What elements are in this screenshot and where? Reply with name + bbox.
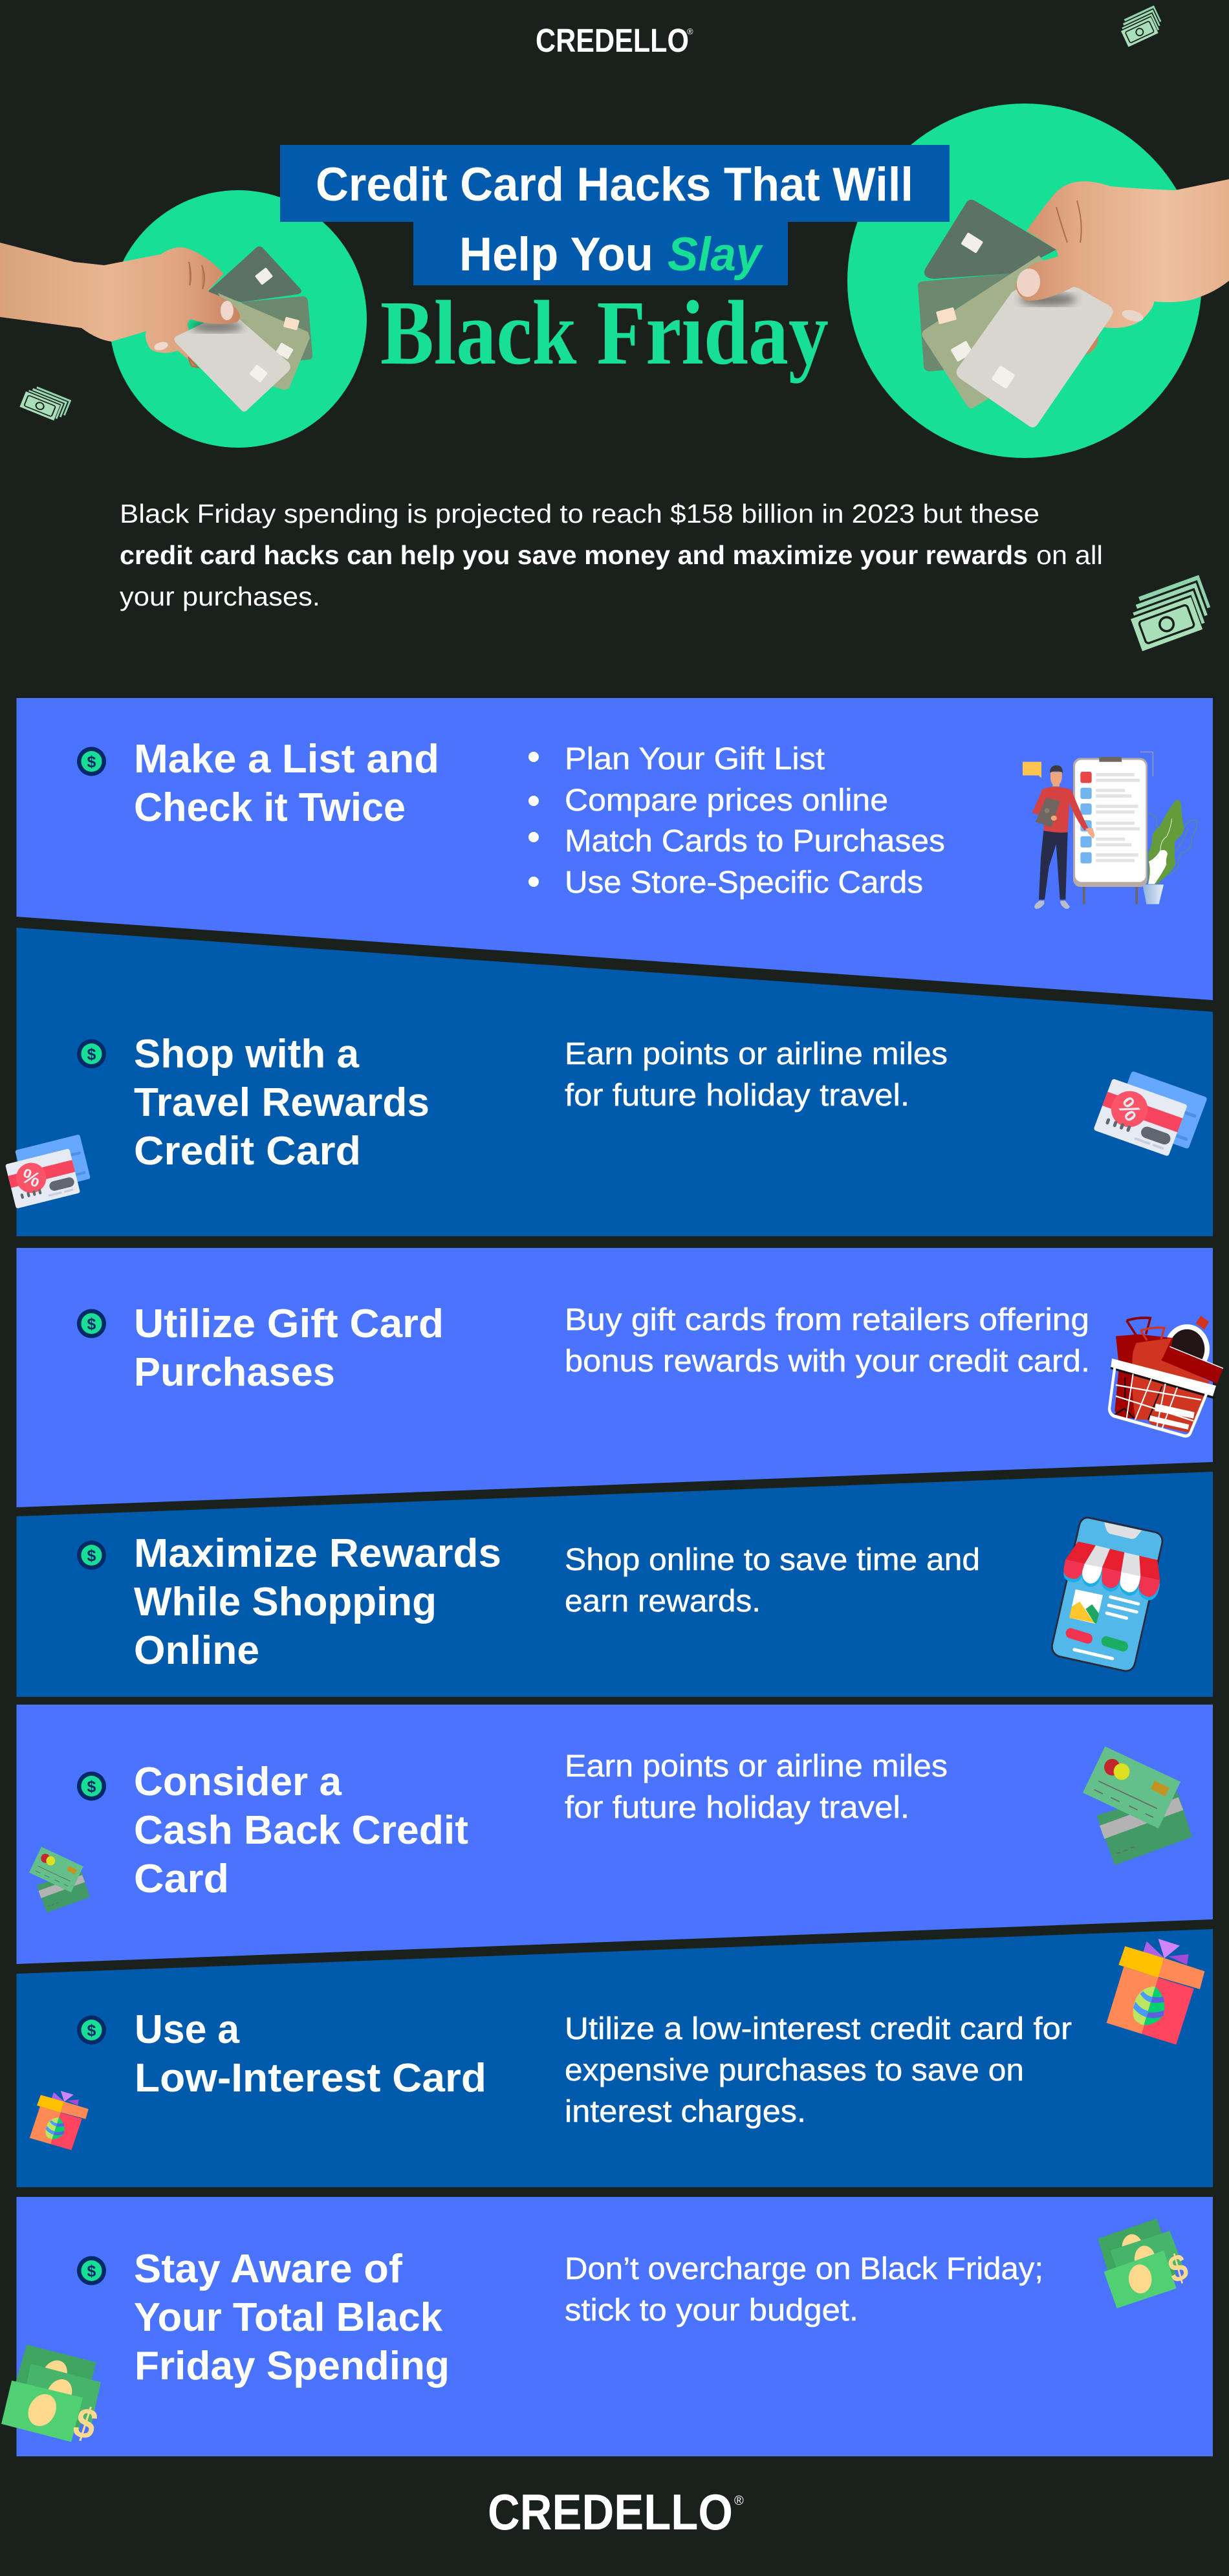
heading: Check it Twice [134, 785, 406, 830]
intro paragraph: your purchases. [120, 582, 320, 611]
body text: stick to your budget. [565, 2293, 858, 2328]
hand palm and fingers [0, 243, 224, 366]
title: Black Friday: Black Friday [380, 281, 829, 384]
body text: Earn points or airline miles [565, 1037, 948, 1071]
icon: coin: $ [87, 1778, 96, 1796]
heading [134, 1032, 430, 1173]
intro paragraph: on all [1036, 540, 1103, 570]
bullet list: Compare prices online [565, 783, 888, 818]
icon: gift right [1107, 1939, 1204, 2045]
icon: coin [77, 1039, 106, 1069]
icon: coin [77, 747, 106, 776]
bullet list [528, 742, 945, 900]
icon: money left [19, 383, 71, 424]
panel: cash back [17, 1705, 1213, 1964]
title box: line 2 [413, 222, 788, 285]
body text: Buy gift cards from retailers offering [565, 1303, 1089, 1337]
icon: coin [77, 1771, 106, 1801]
bullet list: Plan Your Gift List [565, 742, 825, 776]
icon: cash left [0, 2326, 130, 2471]
heading [134, 737, 439, 830]
icon: shopping basket [1109, 1316, 1223, 1436]
intro paragraph [120, 499, 1103, 611]
panel: maximize rewards [17, 1472, 1213, 1697]
heading: Stay Aware of [134, 2247, 402, 2291]
heading [134, 1302, 444, 1395]
cards fan right [918, 200, 1061, 408]
card front right [957, 278, 1113, 428]
heading: Online [134, 1628, 259, 1673]
panel: low interest [17, 1929, 1213, 2187]
illustration: right hand holding cards [847, 104, 1229, 458]
heading: Shop with a [134, 1032, 360, 1076]
heading: While Shopping [134, 1580, 437, 1624]
green circle right [847, 104, 1202, 458]
heading: Credit Card [134, 1129, 361, 1173]
intro paragraph: Black Friday spending is projected to reach $158 billion in 2023 but these [120, 499, 1039, 529]
icon: phone shop [1052, 1518, 1162, 1671]
icon: coin [77, 1541, 106, 1569]
hand palm and fingers [1027, 179, 1229, 328]
body text: earn rewards. [565, 1584, 761, 1619]
body text: for future holiday travel. [565, 1791, 909, 1825]
illustration: left hand holding cards [0, 190, 367, 448]
icon: discount card right [1093, 1065, 1208, 1162]
body text [565, 2252, 1043, 2328]
heading: Card [134, 1857, 229, 1901]
body text: expensive purchases to save on [565, 2053, 1024, 2088]
thumb left [129, 278, 240, 333]
body text: bonus rewards with your credit card. [565, 1344, 1090, 1379]
heading: Travel Rewards [134, 1080, 430, 1125]
panel: make a list [17, 698, 1213, 1000]
heading: Make a List and [134, 737, 439, 781]
thumb right [1016, 249, 1138, 301]
icon: person with list board [1023, 752, 1197, 909]
icon: coin: $ [87, 2262, 96, 2280]
icon: green cards left [29, 1847, 89, 1912]
body text [565, 1749, 948, 1825]
logo: bottom: ® [734, 2494, 744, 2508]
body text: Earn points or airline miles [565, 1749, 948, 1784]
heading: Friday Spending [135, 2344, 450, 2388]
body text: Don’t overcharge on Black Friday; [565, 2252, 1043, 2286]
heading: Your Total Black [134, 2295, 443, 2340]
icon: money top right [1117, 5, 1166, 47]
body text [565, 2012, 1072, 2129]
heading: Purchases [134, 1350, 335, 1395]
body text [565, 1037, 948, 1113]
icon: coin: $ [87, 753, 96, 771]
icon: coin: $ [87, 1315, 96, 1333]
title box: line 1: Credit Card Hacks That Will [316, 158, 913, 211]
panel: total spending [0, 2197, 1213, 2471]
heading: Use a [135, 2007, 239, 2052]
heading [135, 2007, 486, 2101]
body text [565, 1303, 1090, 1379]
body text: Utilize a low-interest credit card for [565, 2012, 1072, 2046]
icon: green cards right [1083, 1747, 1191, 1864]
intro paragraph: credit card hacks can help you save money and maximize your rewards [120, 540, 1028, 570]
green circle left [109, 190, 367, 448]
icon: coin: $ [87, 1547, 96, 1565]
logo: top: ® [687, 27, 693, 36]
icon: gift left [30, 2091, 89, 2150]
icon: cash right [1098, 2218, 1192, 2308]
icon: discount card left [3, 1134, 93, 1208]
panel: travel rewards [3, 928, 1213, 1236]
logo: top: CREDELLO [536, 22, 689, 59]
icon: coin: $ [87, 2022, 96, 2040]
heading: Cash Back Credit [134, 1808, 468, 1853]
title box: line 1 [280, 145, 950, 222]
title box: line 2: Help You [459, 228, 653, 281]
body text: interest charges. [565, 2095, 806, 2129]
heading: Consider a [134, 1760, 342, 1804]
body text [565, 1543, 980, 1619]
heading: Maximize Rewards [134, 1531, 501, 1576]
title box: line 2: Slay [668, 228, 763, 281]
heading [134, 1760, 468, 1901]
icon: coin [77, 1309, 106, 1338]
heading: Low-Interest Card [135, 2056, 486, 2101]
bullet list: Match Cards to Purchases [565, 824, 945, 858]
cards fan left [207, 246, 312, 390]
icon: money lower right [1124, 575, 1217, 651]
heading: Utilize Gift Card [134, 1302, 444, 1346]
body text: for future holiday travel. [565, 1078, 909, 1113]
heading [134, 1531, 501, 1673]
heading [134, 2247, 450, 2388]
icon: coin: $ [87, 1045, 96, 1064]
panel: gift cards [17, 1248, 1223, 1507]
card front left [175, 311, 290, 411]
icon: coin [77, 2016, 106, 2044]
bullet list: Use Store-Specific Cards [565, 866, 923, 900]
body text: Shop online to save time and [565, 1543, 980, 1577]
logo: bottom: CREDELLO [488, 2483, 733, 2540]
icon: coin [77, 2256, 106, 2285]
